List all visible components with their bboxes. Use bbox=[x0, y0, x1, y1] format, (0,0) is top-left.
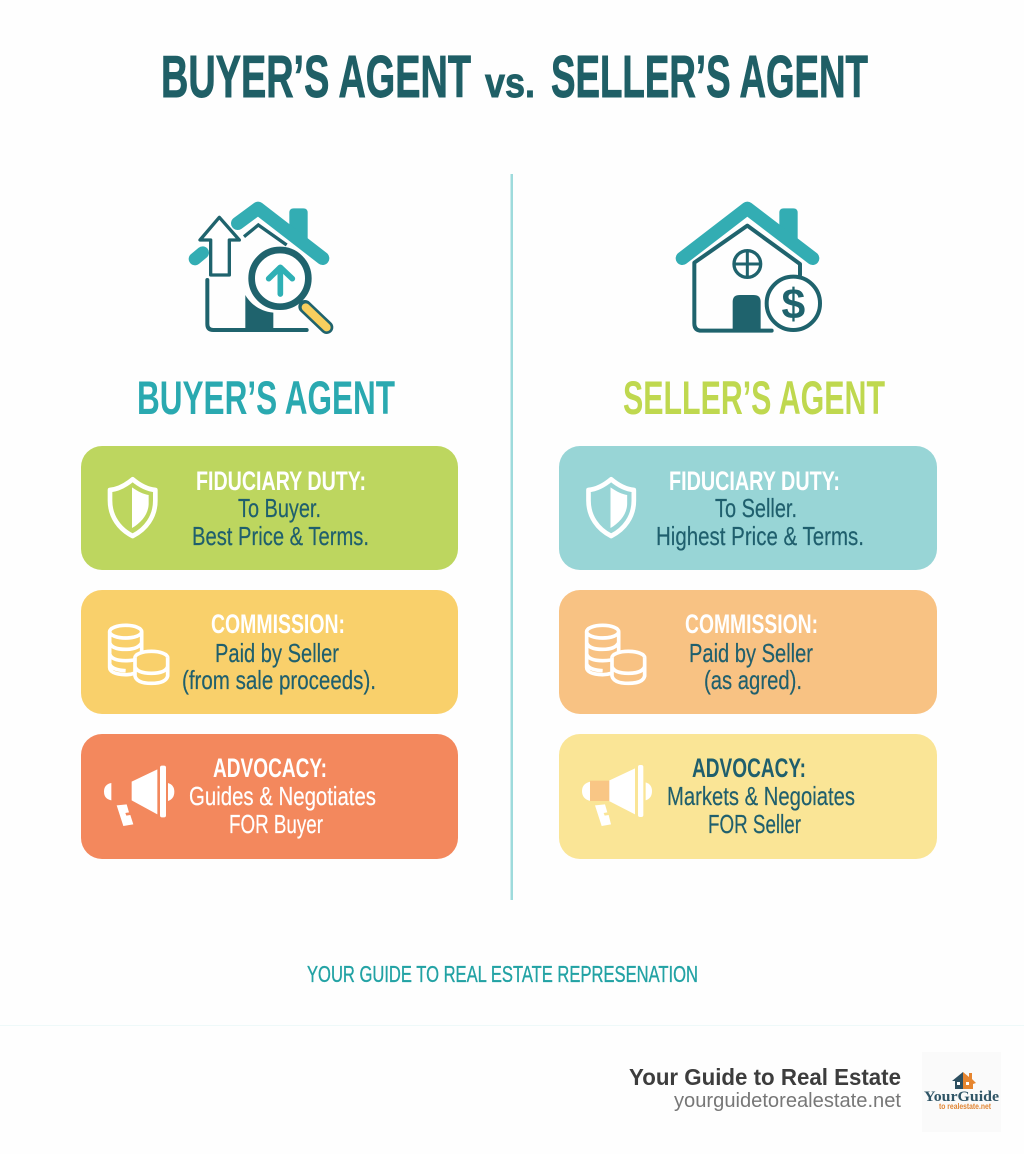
panel: seller advocacy bbox=[559, 734, 937, 859]
text: advocacy heading: ADVOCACY: bbox=[692, 753, 806, 783]
text: best price and terms: Best Price & Terms. bbox=[192, 521, 369, 551]
heading: buyer's agent: BUYER’S AGENT bbox=[137, 371, 395, 424]
footer: website: yourguidetorealestate.net bbox=[674, 1090, 901, 1112]
title: vs. bbox=[485, 59, 535, 106]
icon: house with dollar coin bbox=[682, 208, 820, 331]
text: commission heading: COMMISSION: bbox=[211, 609, 345, 639]
panel: buyer commission bbox=[81, 590, 458, 714]
panel: seller fiduciary duty bbox=[559, 446, 937, 570]
icon: shield bbox=[110, 479, 155, 536]
footer: logo: to realestate.net bbox=[939, 1102, 991, 1111]
text: for seller: FOR Seller bbox=[708, 809, 801, 839]
icon: coins bbox=[587, 625, 645, 683]
text: to buyer: To Buyer. bbox=[238, 493, 321, 523]
icon: megaphone bbox=[104, 766, 174, 826]
footer: logo bbox=[922, 1052, 1001, 1132]
text: commission heading: COMMISSION: bbox=[685, 609, 818, 639]
heading: seller's agent: SELLER’S AGENT bbox=[623, 371, 885, 424]
icon: shield bbox=[588, 479, 634, 536]
text: paid by seller: Paid by Seller bbox=[215, 638, 339, 668]
text: markets and negotiates: Markets & Negoiates bbox=[667, 781, 855, 811]
icon: coins bbox=[110, 625, 168, 683]
icon: house with dollar coin: $ bbox=[781, 280, 805, 328]
title: BUYER’S AGENT bbox=[161, 44, 471, 110]
text: fiduciary heading: FIDUCIARY DUTY: bbox=[196, 466, 366, 496]
text: from sale proceeds: (from sale proceeds). bbox=[182, 665, 376, 695]
text: fiduciary heading: FIDUCIARY DUTY: bbox=[669, 466, 840, 496]
footer: logo: YourGuide bbox=[924, 1089, 999, 1105]
footer: brand name: Your Guide to Real Estate bbox=[629, 1064, 901, 1090]
icon: megaphone bbox=[582, 765, 652, 826]
center divider bbox=[510, 174, 513, 900]
panel: buyer fiduciary duty bbox=[81, 446, 458, 570]
text: highest price and terms: Highest Price & Terms. bbox=[656, 521, 864, 551]
text: guides and negotiates: Guides & Negotiates bbox=[189, 781, 376, 811]
text: to seller: To Seller. bbox=[715, 493, 797, 523]
panel: buyer advocacy bbox=[81, 734, 458, 859]
text: advocacy heading: ADVOCACY: bbox=[213, 753, 327, 783]
panel: seller commission bbox=[559, 590, 937, 714]
text: as agreed: (as agred). bbox=[704, 665, 802, 695]
text: paid by seller: Paid by Seller bbox=[689, 638, 813, 668]
footer separator bbox=[0, 1025, 1024, 1026]
title bbox=[161, 44, 868, 110]
text: for buyer: FOR Buyer bbox=[229, 809, 323, 839]
tagline: YOUR GUIDE TO REAL ESTATE REPRESENATION bbox=[307, 961, 698, 987]
icon: house with magnifying glass and up arrow bbox=[195, 208, 327, 330]
